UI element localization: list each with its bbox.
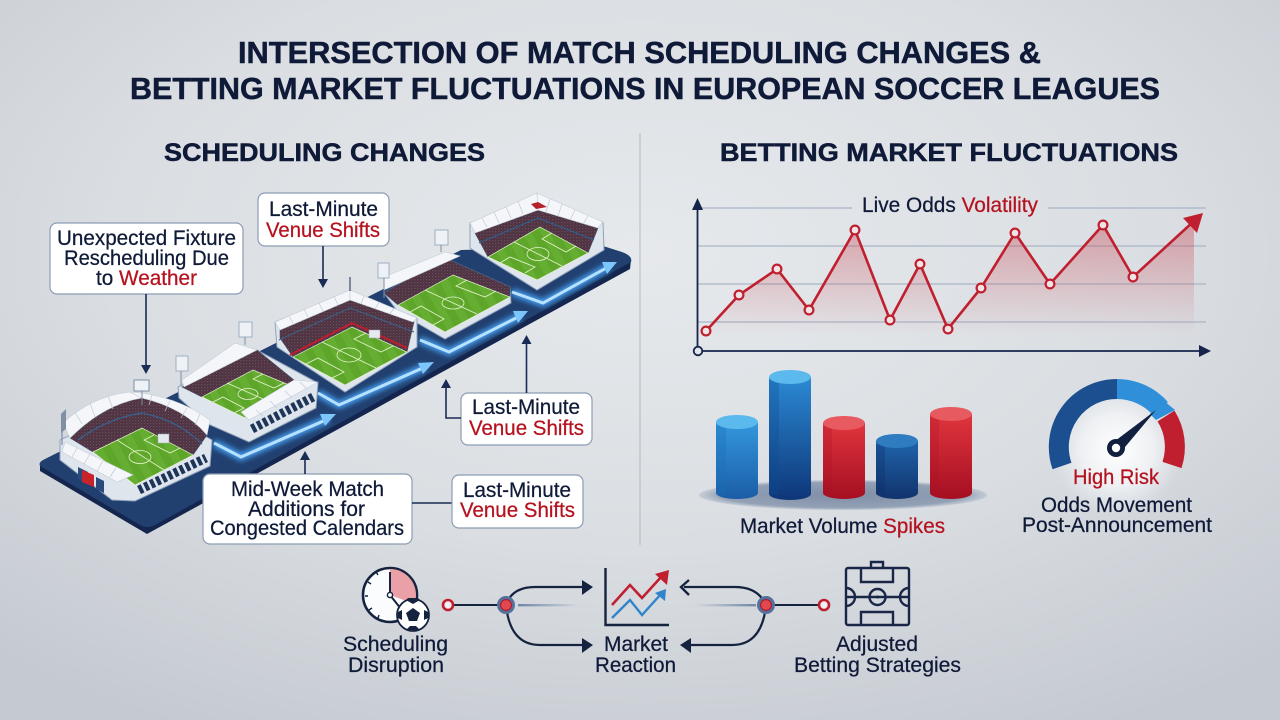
chart title: Live Odds Volatility	[862, 194, 1038, 217]
callout: last-minute venue shifts top: Venue Shifts	[266, 219, 380, 242]
callout: last-minute venue shifts top	[258, 193, 389, 246]
callout: unexpected fixture rescheduling: Unexpected Fixture	[57, 227, 236, 250]
gauge: high risk	[1022, 384, 1212, 537]
line chart: live odds volatility	[692, 194, 1211, 357]
gauge caption: Odds Movement	[1041, 494, 1192, 517]
bar 2	[769, 370, 811, 500]
flow diagram	[343, 562, 961, 677]
label: adjusted betting strategies: Betting Strategies	[794, 654, 961, 677]
callout: last-minute venue shifts right: Venue Shifts	[469, 417, 584, 440]
stadium 4	[378, 230, 511, 339]
bar 4	[876, 434, 918, 499]
label: adjusted betting strategies	[794, 633, 961, 677]
stadium platform	[40, 246, 631, 534]
callout: last-minute venue shifts bottom: Last-Minute	[463, 479, 571, 502]
connector: strategies to market	[680, 580, 829, 653]
callout: last-minute venue shifts bottom: Venue Shifts	[460, 499, 575, 522]
arrow: mid-week callout to platform	[300, 451, 310, 474]
stadium 3	[275, 277, 417, 392]
callout: mid-week match additions	[203, 474, 412, 544]
gauge caption	[1022, 494, 1212, 537]
title: BETTING MARKET FLUCTUATIONS IN EUROPEAN SOCCER LEAGUES	[130, 71, 1160, 106]
callout: mid-week match additions: Congested Calendars	[210, 517, 404, 540]
bar 1	[716, 415, 758, 499]
title	[130, 35, 1160, 106]
callout: unexpected fixture rescheduling: Rescheduling Due	[64, 247, 229, 270]
label: scheduling disruption: Disruption	[348, 654, 444, 677]
gauge caption: Post-Announcement	[1022, 514, 1212, 537]
gauge label: high risk: High Risk	[1073, 466, 1159, 489]
panel: scheduling changes	[40, 193, 631, 544]
label: scheduling disruption	[343, 633, 448, 677]
label: market reaction: Reaction	[595, 654, 676, 677]
arrows: right venue callout up to platform	[441, 335, 532, 418]
arrow: fixture callout to stadium 1	[141, 294, 151, 374]
stadium 2	[176, 322, 318, 442]
connector: disruption to market	[443, 580, 593, 653]
bar 3	[823, 416, 865, 499]
icon: clock with soccer ball	[363, 568, 429, 631]
callout: mid-week match additions: Mid-Week Match	[231, 478, 384, 501]
bar 5	[930, 407, 972, 499]
callout: last-minute venue shifts right	[461, 393, 592, 445]
callout: unexpected fixture rescheduling	[50, 223, 243, 294]
icon: tactical pitch	[846, 562, 909, 625]
callout: mid-week match additions: Additions for	[248, 498, 365, 521]
bar chart label: Market Volume Spikes	[740, 515, 945, 538]
callout: last-minute venue shifts bottom	[452, 475, 583, 528]
stadium 1	[60, 380, 212, 501]
stadium 5	[470, 193, 604, 290]
arrow: top venue callout to stadium 3	[318, 246, 328, 288]
title: INTERSECTION OF MATCH SCHEDULING CHANGES &	[238, 35, 1041, 70]
label: adjusted betting strategies: Adjusted	[836, 633, 918, 656]
glowing progress arrows	[214, 262, 617, 457]
label: scheduling disruption: Scheduling	[343, 633, 448, 656]
panel: betting market fluctuations	[692, 194, 1212, 538]
label: market reaction	[595, 633, 676, 677]
heading: betting market fluctuations: BETTING MARKET FLUCTUATIONS	[720, 139, 1178, 167]
bar chart: market volume spikes	[699, 370, 987, 538]
icon: market chart	[606, 568, 669, 625]
heading: scheduling changes: SCHEDULING CHANGES	[164, 139, 485, 167]
callout: last-minute venue shifts right: Last-Minute	[472, 396, 580, 419]
callout: unexpected fixture rescheduling: to Weather	[96, 267, 197, 290]
callout: last-minute venue shifts top: Last-Minute	[269, 198, 378, 221]
label: market reaction: Market	[604, 633, 668, 656]
